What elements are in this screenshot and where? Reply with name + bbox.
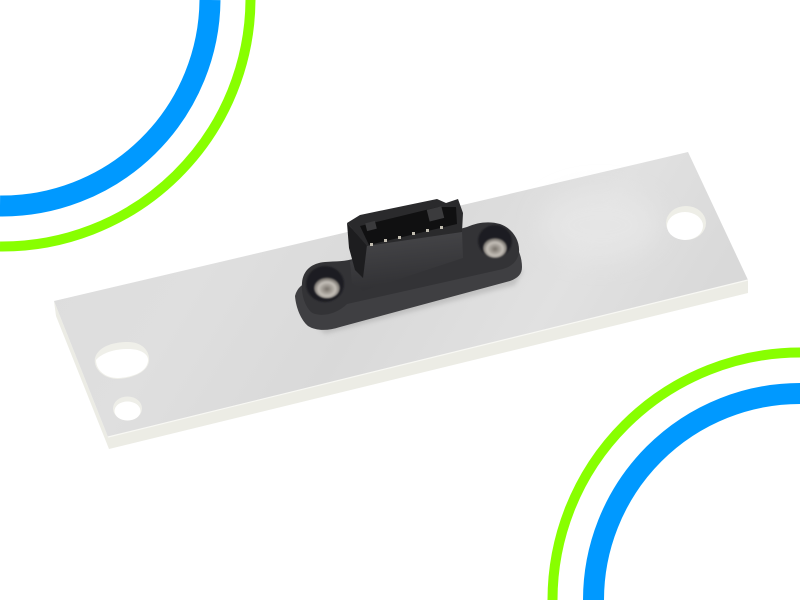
right screw: [483, 238, 507, 258]
plate edge highlight: [108, 280, 748, 437]
right hole: [666, 206, 706, 240]
connector shadow: [300, 270, 524, 334]
connector pins: [370, 226, 443, 246]
aluminium plate: [54, 152, 748, 449]
housing front face: [350, 231, 463, 291]
mounting slot: [95, 342, 149, 379]
base flange: [295, 236, 522, 330]
upper lobes body: [302, 222, 519, 315]
decorative arcs: top left: [0, 0, 250, 247]
plate front edge: [54, 280, 748, 449]
plate top face: [54, 152, 748, 437]
latch right: [427, 206, 444, 222]
housing opening: [360, 207, 457, 245]
small hole: [113, 396, 142, 420]
decorative arcs: bottom right: [552, 352, 800, 600]
right counterbore: [478, 225, 512, 257]
connector assembly: [295, 199, 524, 334]
plate sheen: [540, 190, 660, 260]
left counterbore: [306, 266, 344, 302]
left screw: [314, 278, 340, 298]
latch left: [365, 221, 377, 231]
housing left face: [347, 223, 367, 278]
housing top rim: [347, 199, 463, 246]
